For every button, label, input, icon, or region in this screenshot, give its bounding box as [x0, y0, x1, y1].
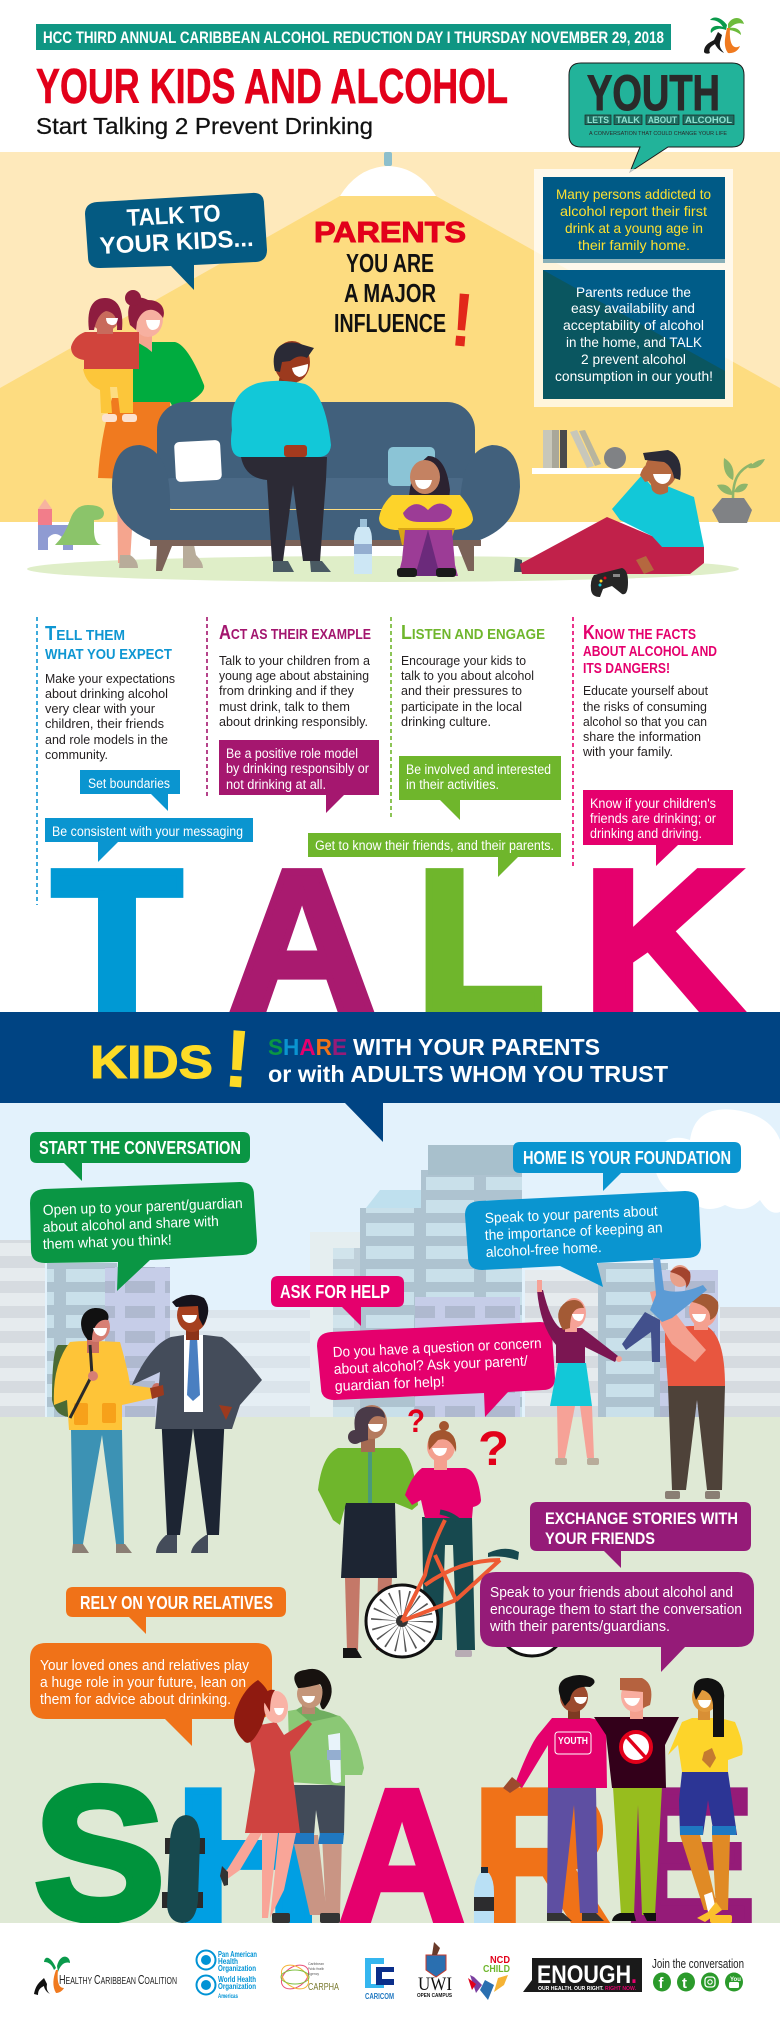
body text: and their pressures to [401, 683, 522, 698]
big word: SHARE: R [472, 1749, 610, 1964]
fact box: parents reduce: 2 prevent alcohol [581, 351, 686, 367]
subtitle: Start Talking 2 Prevent Drinking [36, 113, 373, 139]
callout: positive role model: Be a positive role model [226, 746, 358, 761]
callout: be consistent: Be consistent with your messaging [52, 824, 243, 839]
youth speech bubble: A CONVERSATION THAT COULD CHANGE YOUR LIFE [589, 131, 728, 137]
bubble: your loved ones: Your loved ones and relatives play [40, 1657, 249, 1674]
speech bubble: talk to your kids: TALK TO [126, 200, 221, 232]
body text: must drink, talk to them [219, 699, 350, 714]
label: home is your foundation: HOME IS YOUR FOUNDATION [523, 1148, 731, 1168]
logo: UWI: OPEN CAMPUS [417, 1993, 453, 1999]
logo: PAHO WHO: Organization [218, 1964, 256, 1973]
person: couple [220, 1669, 364, 1923]
logo: CARPHA: Caribbean [308, 1961, 324, 1966]
friend: pink youth top: YOUTH [558, 1736, 588, 1747]
banner: kids share: ! [221, 1013, 254, 1106]
fact box: first drink: drink at a young age in [565, 220, 703, 236]
callout: set boundaries: Set boundaries [88, 776, 170, 791]
logo: CARPHA [277, 1960, 339, 1994]
logo: NCD Child: CHILD [483, 1964, 510, 1975]
bubble: open up: Open up to your parent/guardian [43, 1196, 243, 1219]
label: rely on your relatives: RELY ON YOUR RELATIVES [80, 1593, 273, 1613]
heading: ABOUT ALCOHOL AND [583, 643, 717, 660]
bubble: speak to your friends [480, 1572, 754, 1672]
logo: PAHO WHO: Pan American [218, 1950, 257, 1959]
body text: and role models in the [45, 732, 168, 747]
banner: kids share: SHARE [268, 1034, 347, 1060]
person: man on floor [514, 450, 704, 574]
label: start the conversation [30, 1132, 250, 1181]
logo: CARPHA: Public Health [308, 1966, 324, 1971]
friend: yellow top [668, 1678, 743, 1923]
big word: TALK [52, 828, 744, 1056]
callout: know if friends: drinking and driving. [590, 826, 702, 841]
bubble: open up [30, 1182, 257, 1291]
body text: talk to you about alcohol [401, 668, 534, 683]
fact box: first drink: Many persons addicted to [556, 186, 711, 202]
skyline [0, 1145, 780, 1417]
panel: facts [534, 169, 733, 407]
callout: know if friends: friends are drinking; or [590, 811, 716, 826]
big word: SHARE: S [34, 1748, 165, 1960]
big word: SHARE [35, 1782, 752, 1923]
heading: parents you are a major influence [314, 217, 477, 364]
logo: Healthy Caribbean Coalition: HEALTHY CARIBBEAN COALITION [59, 1972, 177, 1987]
body text: about drinking alcohol [45, 686, 168, 701]
toys [38, 499, 104, 550]
label: home is your foundation [513, 1142, 741, 1191]
bookshelf [532, 430, 650, 474]
plant [712, 458, 765, 523]
header banner [36, 24, 671, 50]
logo: CARICOM: CARICOM [365, 1992, 394, 2001]
body text: Educate yourself about [583, 683, 708, 698]
callout: positive role model: not drinking at all. [226, 777, 326, 792]
question marks: ? [478, 1423, 509, 1476]
person: student with backpack [52, 1308, 162, 1553]
banner: kids share [0, 1012, 780, 1142]
youth speech bubble: ALCOHOL [685, 115, 733, 125]
callout: know if friends [583, 790, 733, 866]
bubble: open up: about alcohol and share with [43, 1214, 219, 1236]
speech bubble: talk to your kids: YOUR KIDS... [99, 225, 254, 260]
person: man on sofa [231, 341, 331, 572]
bicycle [366, 1512, 568, 1657]
body text: from drinking and if they [219, 683, 354, 698]
title: YOUR KIDS AND ALCOHOL [36, 60, 508, 114]
panel: tell them [37, 617, 253, 905]
banner: kids share: WITH YOUR PARENTS [353, 1034, 600, 1060]
body text: Make your expectations [45, 671, 175, 686]
callout: be involved: Be involved and interested [406, 762, 551, 777]
logo: PAHO WHO [196, 1950, 257, 2000]
label: start the conversation: START THE CONVERSATION [39, 1138, 241, 1158]
body text: community. [45, 747, 108, 762]
bubble: do you have a question: about alcohol? Ask your parent/ [333, 1354, 529, 1378]
icon: facebook: f [658, 1975, 664, 1992]
body text [401, 653, 534, 729]
cushion: white [174, 440, 222, 482]
bubble: do you have a question [317, 1322, 555, 1417]
body text: young age about abstaining [219, 668, 369, 683]
icon: game controller [591, 568, 628, 597]
sofa [112, 402, 520, 571]
youth speech bubble [569, 63, 744, 172]
logo: PAHO WHO: Health [218, 1957, 238, 1966]
youth speech bubble: ABOUT [648, 115, 677, 125]
body text: with your family. [582, 744, 673, 759]
body text: share the information [583, 729, 701, 744]
fact box: parents reduce: acceptability of alcohol [563, 317, 704, 333]
body text [582, 683, 708, 759]
person: woman waving [537, 1280, 622, 1465]
body text: very clear with your [45, 701, 156, 716]
bubble: do you have a question: guardian for help! [334, 1374, 445, 1395]
callout: know if friends: Know if your children's [590, 796, 716, 811]
icon: ceiling lamp [340, 152, 436, 196]
heading: KNOW THE FACTS [583, 622, 696, 644]
callout: get to know [308, 833, 561, 877]
logo: ENOUGH: OUR HEALTH. OUR RIGHT. RIGHT NOW. [538, 1986, 637, 1992]
heading: TELL THEM [45, 623, 125, 645]
bubble: speak to your parents: Speak to your parents about [484, 1203, 658, 1227]
speech bubble: talk to your kids [85, 193, 267, 290]
fact box: first drink [543, 177, 725, 263]
big word: TALK: A [228, 828, 376, 1056]
bubble: speak to your parents [465, 1191, 701, 1287]
heading: parents you are a major influence: A MAJOR [344, 278, 436, 308]
cushion: blue [388, 447, 435, 486]
label: ask for help [271, 1276, 404, 1326]
icon: youtube: You [730, 1977, 741, 1983]
logo: Healthy Caribbean Coalition [34, 1957, 177, 1995]
callout: be involved: in their activities. [406, 777, 499, 792]
label: exchange stories: EXCHANGE STORIES WITH [545, 1509, 738, 1528]
social: join the conversation [652, 1956, 744, 1992]
panel: know the facts [573, 617, 733, 868]
body text: the risks of consuming [583, 699, 707, 714]
bubble: speak to your friends: Speak to your friends about alcohol and [490, 1584, 733, 1601]
icon: HCC logo [704, 18, 744, 54]
fact box: parents reduce: in the home, and TALK [566, 334, 703, 350]
big word: SHARE: A [338, 1749, 466, 1964]
fact box: first drink: alcohol report their first [560, 203, 707, 219]
logo: PAHO WHO: World Health [218, 1975, 256, 1984]
label: exchange stories: YOUR FRIENDS [545, 1529, 655, 1548]
fact box: parents reduce: easy availability and [571, 300, 695, 316]
banner: kids share: or with ADULTS WHOM YOU TRUST [268, 1061, 668, 1087]
question marks [407, 1403, 509, 1476]
label: rely on your relatives [66, 1587, 286, 1634]
panel: tell them: WHAT YOU EXPECT [45, 646, 172, 663]
heading: parents you are a major influence: YOU ARE [346, 248, 434, 278]
heading: parents you are a major influence: PARENTS [314, 217, 466, 249]
youth speech bubble: YOUTH [587, 65, 720, 121]
body text: children, their friends [45, 716, 164, 731]
group: three friends [503, 1675, 743, 1923]
fact box: parents reduce: Parents reduce the [576, 284, 691, 300]
fact box: parents reduce [543, 270, 725, 399]
body text: about drinking responsibly. [219, 714, 368, 729]
bubble: your loved ones: them for advice about drinking. [40, 1691, 231, 1708]
big word: SHARE: H [175, 1749, 322, 1964]
heading [583, 622, 717, 677]
person: mother with child [71, 290, 204, 568]
light cone [0, 196, 780, 522]
callout: get to know: Get to know their friends, and their parents. [315, 838, 554, 853]
person: girl sitting [379, 456, 473, 577]
water bottle [354, 519, 372, 574]
bubble: open up: them what you think! [43, 1233, 172, 1253]
body text: drinking culture. [401, 714, 491, 729]
body text [219, 653, 371, 729]
icon: instagram [701, 1972, 719, 1992]
cloud [654, 1109, 780, 1213]
big word: TALK: L [415, 828, 545, 1056]
heading: parents you are a major influence: ! [448, 277, 477, 364]
question marks: ? [407, 1403, 425, 1439]
callout: positive role model [219, 740, 379, 813]
youth speech bubble: TALK [616, 115, 641, 125]
floor shadow [27, 556, 739, 582]
bubble: speak to your parents: alcohol-free home. [485, 1240, 602, 1261]
logo: PAHO WHO: Organization [218, 1982, 256, 1991]
bubble: your loved ones [30, 1643, 272, 1746]
logo: NCD Child [468, 1955, 510, 2000]
person: father lifting child [622, 1258, 725, 1499]
label: exchange stories [530, 1502, 751, 1568]
ground [0, 1417, 780, 1923]
logo: ENOUGH: ENOUGH. [537, 1961, 637, 1989]
bubble: speak to your parents: the importance of keeping an [484, 1220, 663, 1244]
callout: be involved [399, 756, 561, 820]
big word: SHARE: E [621, 1749, 756, 1964]
bubble: do you have a question: Do you have a question or concern [332, 1336, 542, 1361]
friend: black top [594, 1678, 679, 1921]
logo: CARPHA: Agency [308, 1971, 319, 1976]
youth speech bubble: LETS [587, 115, 609, 125]
logo: CARICOM [365, 1958, 394, 2001]
body text [45, 671, 175, 762]
label: ask for help: ASK FOR HELP [280, 1282, 390, 1302]
callout: be consistent [45, 818, 253, 862]
person: businessman [132, 1295, 262, 1553]
logo: CARPHA: CARPHA [308, 1982, 339, 1993]
icon: twitter: t [682, 1975, 687, 1992]
bubble: speak to your friends: with their parents/guardians. [489, 1618, 670, 1635]
logo: UWI [417, 1942, 453, 1999]
bubble: your loved ones: a huge role in your future, lean on [40, 1674, 246, 1691]
logo: UWI: UWI [418, 1974, 452, 1995]
logo: NCD Child: NCD [490, 1955, 510, 1966]
panel: share scene background [0, 1103, 780, 1923]
logo: PAHO WHO: Americas [218, 1994, 238, 2000]
body text: Encourage your kids to [401, 653, 526, 668]
heading: LISTEN AND ENGAGE [401, 622, 545, 644]
person: mother [318, 1405, 418, 1658]
big word: TALK: K [582, 828, 744, 1056]
bottle near share [474, 1867, 494, 1923]
panel: living room [0, 152, 780, 522]
heading: ITS DANGERS! [583, 660, 670, 677]
panel: listen and engage [308, 617, 561, 877]
skateboard [162, 1815, 205, 1923]
friend: pink youth top [503, 1675, 607, 1921]
callout: positive role model: by drinking responsibly or [226, 761, 369, 776]
bubble: speak to your friends: encourage them to start the conversation [490, 1601, 742, 1618]
heading: parents you are a major influence: INFLUENCE [334, 308, 446, 338]
fact box: first drink: their family home. [578, 237, 690, 253]
body text: Talk to your children from a [219, 653, 371, 668]
banner: kids share: KIDS [90, 1036, 213, 1088]
panel: act as their example [207, 617, 379, 813]
callout: set boundaries [80, 770, 180, 811]
heading: ACT AS THEIR EXAMPLE [219, 622, 371, 644]
social: join the conversation: Join the conversation [652, 1956, 744, 1971]
big word: TALK: T [52, 828, 182, 1056]
fact box: parents reduce: consumption in our youth! [555, 368, 713, 384]
body text: participate in the local [401, 699, 522, 714]
person: girl with bike [405, 1421, 481, 1657]
body text: alcohol so that you can [583, 714, 707, 729]
